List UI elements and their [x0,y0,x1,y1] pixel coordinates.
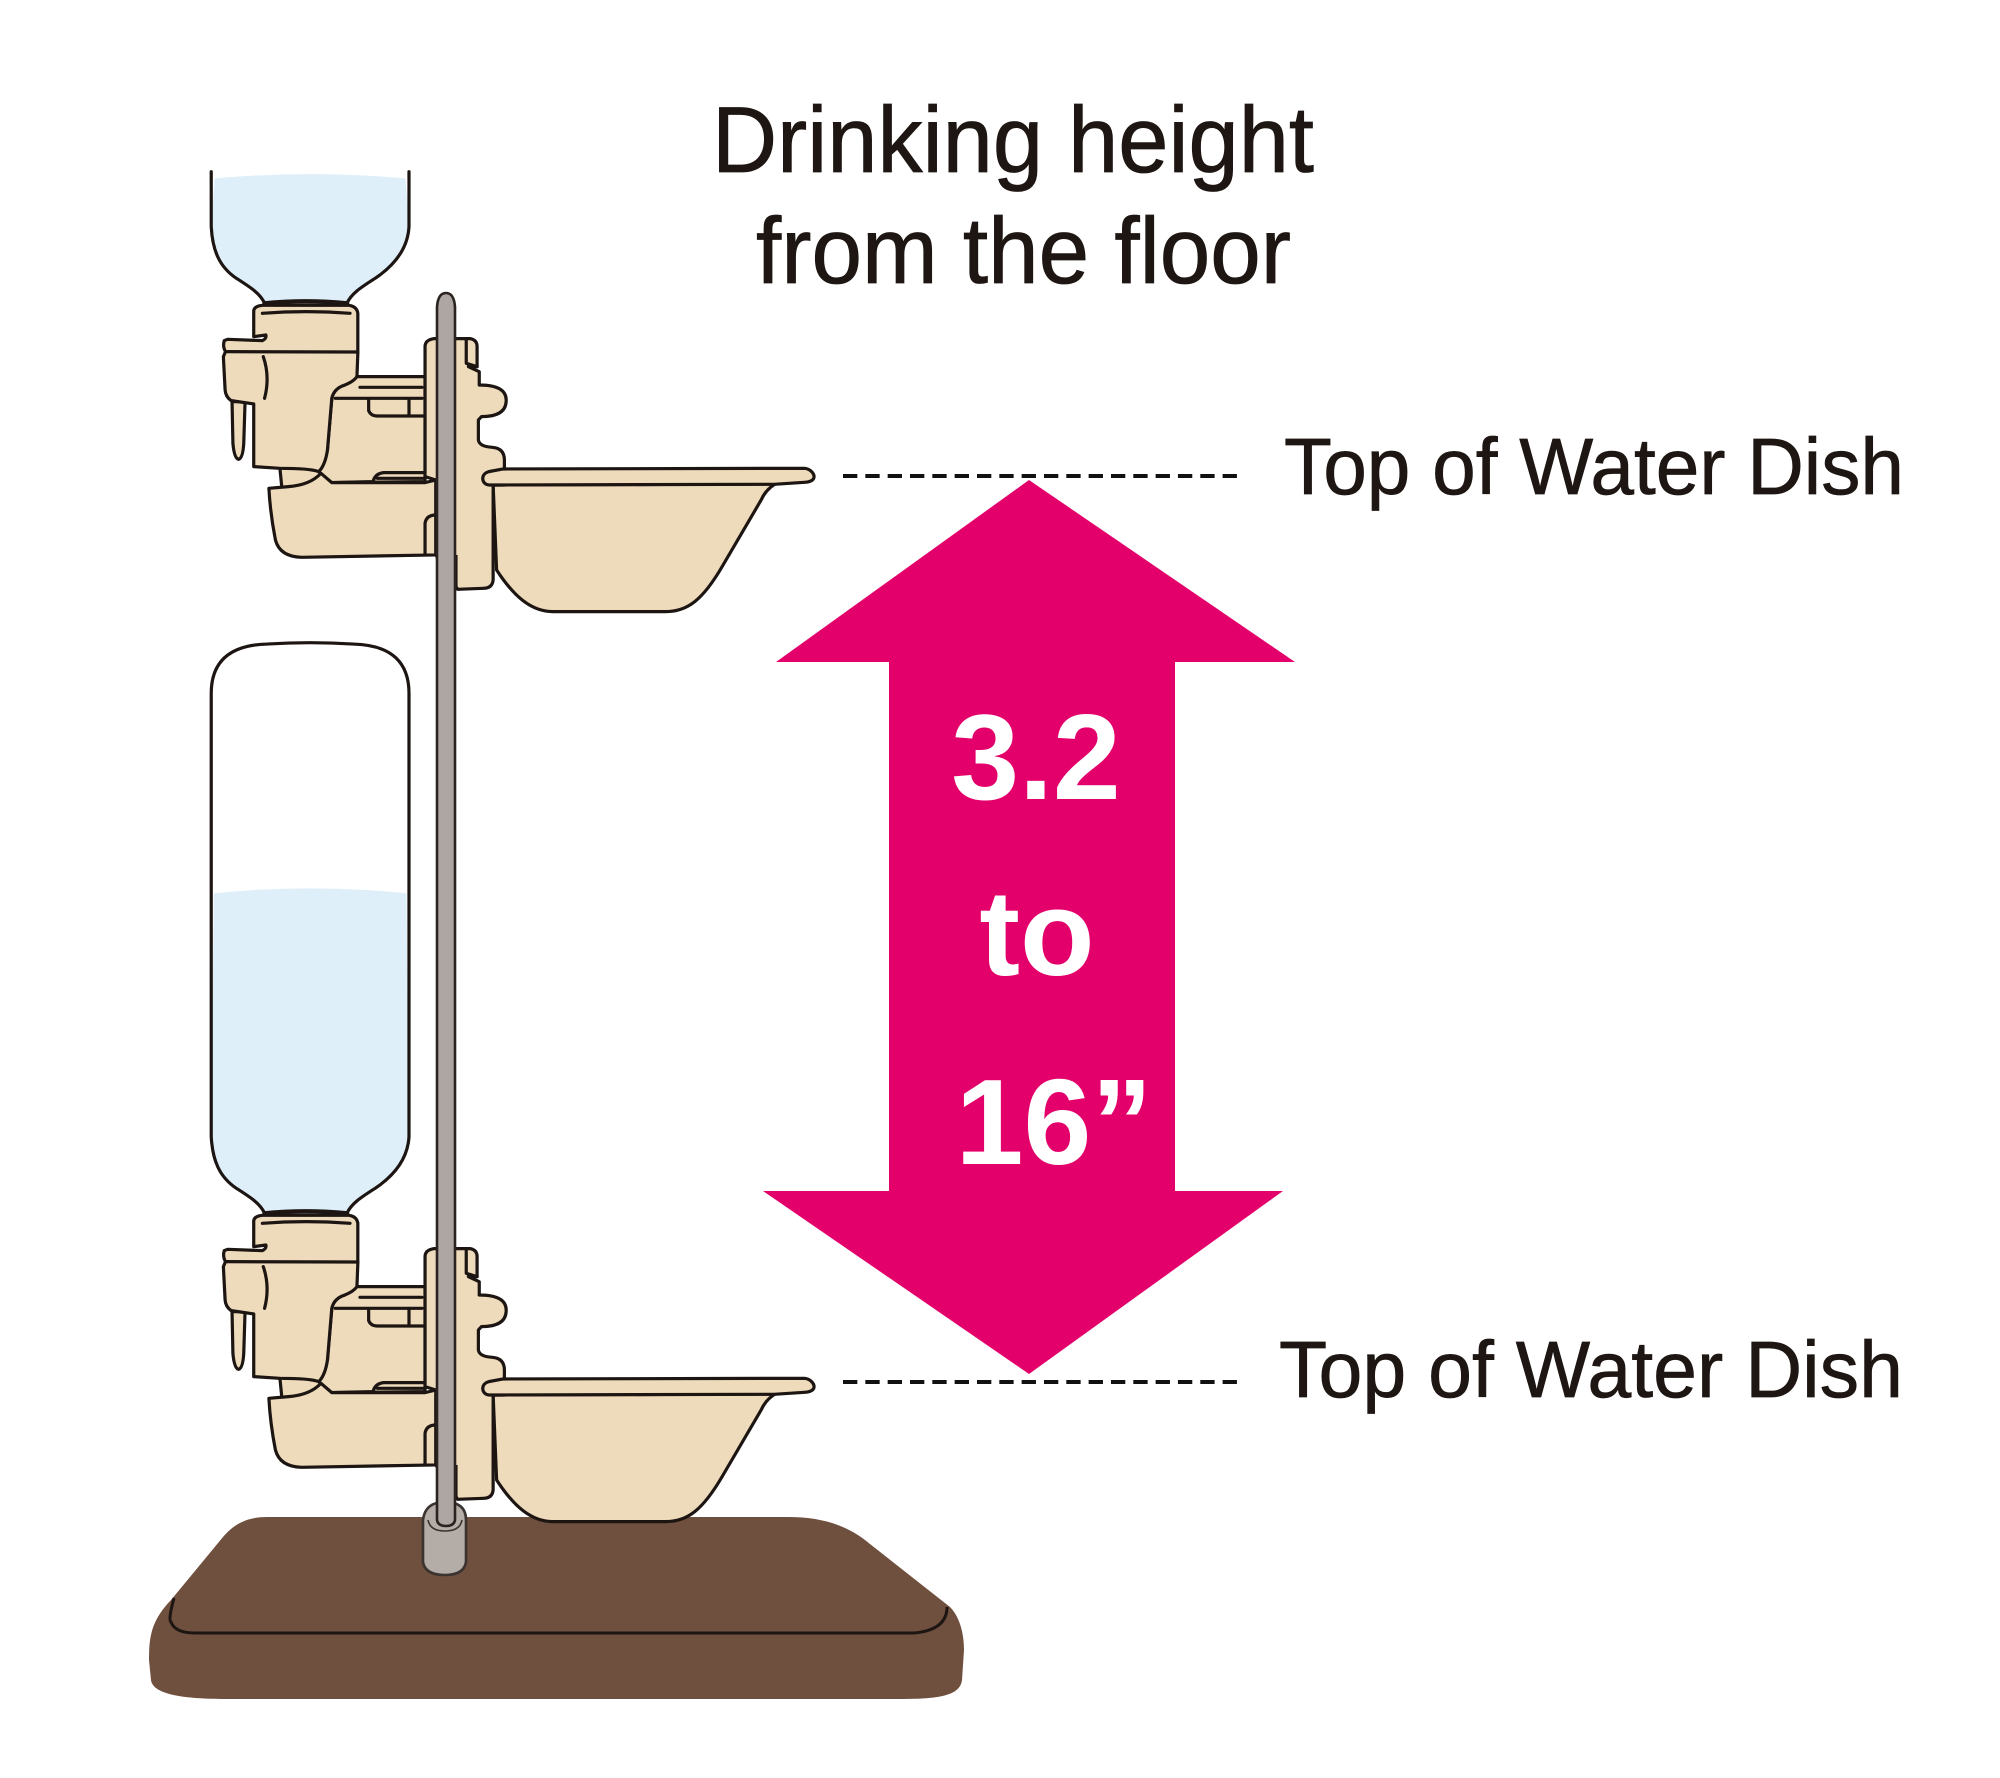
label: upper dish: Top of Water Dish [1284,422,1904,511]
height measurement text: 16” [956,1054,1152,1190]
height measurement text: 3.2 [951,689,1121,825]
top bottle with water [211,172,409,303]
double-headed height arrow [763,480,1295,1374]
top dispenser and water dish [223,305,814,612]
title [712,87,1314,303]
dashed line: upper dish level [843,474,1237,478]
height measurement text [951,689,1152,1190]
base tray [149,1517,964,1699]
lower dispenser and water dish [223,1215,814,1522]
lower bottle with water [211,643,409,1213]
label: lower dish: Top of Water Dish [1279,1325,1903,1414]
height measurement text: to [979,865,1095,1001]
title: Drinking height [712,87,1314,192]
dashed line: lower dish level [843,1380,1237,1384]
vertical rod with socket [423,293,466,1575]
title: from the floor [756,198,1291,303]
